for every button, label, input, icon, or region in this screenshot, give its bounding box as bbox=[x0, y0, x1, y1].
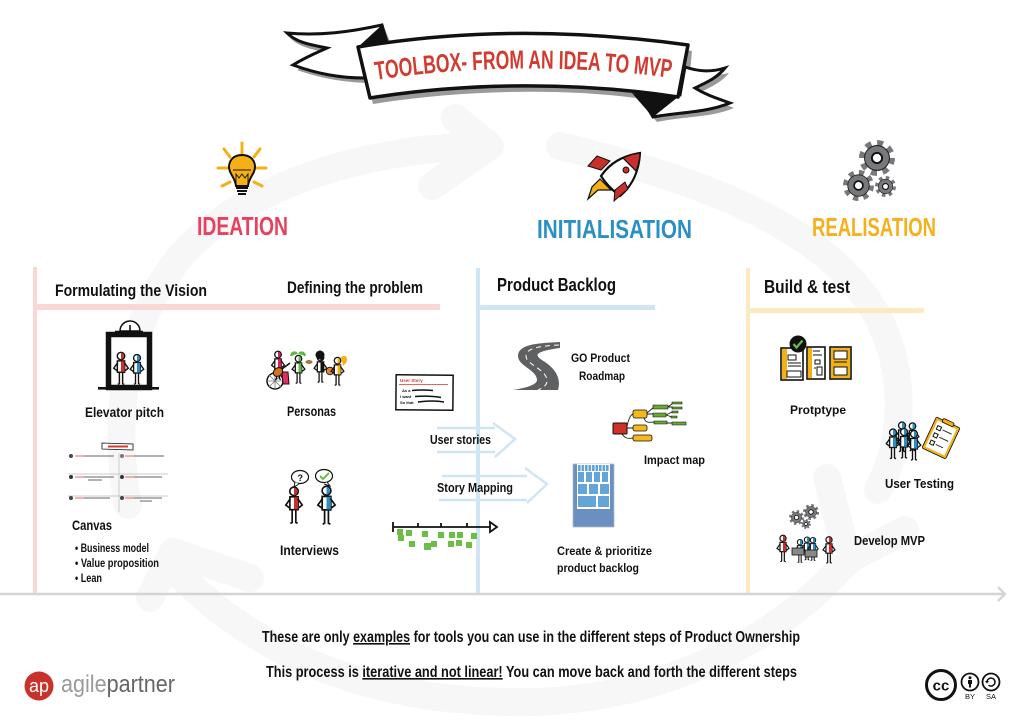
icon: user story card: I want bbox=[400, 394, 412, 399]
label: elevator pitch: Elevator pitch bbox=[85, 404, 164, 420]
banner body bbox=[358, 33, 688, 98]
list: canvas types: • Business model bbox=[75, 541, 149, 555]
footer note: iterative: This process is iterative and not linear! You can move back and forth the different steps bbox=[266, 664, 797, 681]
icon: user story card: So that bbox=[400, 400, 414, 405]
label: create and prioritize product backlog: Create & prioritize bbox=[557, 544, 652, 558]
label: interviews: Interviews bbox=[280, 542, 339, 558]
creative commons badges: BY bbox=[965, 692, 975, 701]
label: user stories: User stories bbox=[430, 432, 491, 447]
icon: rocket bbox=[588, 153, 640, 201]
creative commons badges bbox=[926, 670, 1000, 701]
icon: prototype wireframes bbox=[781, 336, 851, 380]
story map timeline bbox=[393, 522, 497, 550]
label: create and prioritize product backlog: product backlog bbox=[557, 561, 639, 575]
icon: develop team bbox=[777, 505, 835, 563]
folds bbox=[358, 25, 388, 47]
label: develop mvp: Develop MVP bbox=[854, 533, 925, 548]
icon: interview figures: ? bbox=[298, 473, 303, 483]
logo: agile partner bbox=[24, 671, 175, 700]
icon: product backlog bbox=[573, 464, 614, 527]
title text: TOOLBOX- FROM AN IDEA TO MVP bbox=[374, 50, 672, 80]
creative commons badges: cc bbox=[933, 678, 949, 694]
list: canvas types: • Value proposition bbox=[75, 556, 159, 570]
icon: road bbox=[513, 342, 560, 390]
list: canvas types bbox=[75, 541, 159, 585]
label: story mapping: Story Mapping bbox=[437, 480, 513, 495]
icon: impact map bbox=[613, 402, 686, 441]
label: canvas: Canvas bbox=[72, 517, 112, 533]
label: go product roadmap bbox=[571, 351, 630, 383]
icon: user story card: User Story bbox=[400, 378, 423, 383]
footer note: examples: These are only examples for tools you can use in the different steps of Product Ownership bbox=[262, 629, 800, 646]
label: user testing: User Testing bbox=[885, 476, 954, 491]
icon: user story card: As a bbox=[402, 388, 411, 393]
title banner bbox=[283, 23, 734, 122]
background cycle arrows bbox=[121, 118, 905, 702]
label: impact map: Impact map bbox=[644, 453, 705, 467]
creative commons badges: SA bbox=[986, 692, 996, 701]
icon: user story card bbox=[396, 375, 453, 410]
logo: agile partner: agilepartner bbox=[61, 671, 175, 698]
icon: interview figures bbox=[286, 470, 335, 524]
icon: elevator bbox=[98, 321, 159, 390]
heading: initialisation: INITIALISATION bbox=[537, 214, 692, 244]
label: prototype: Protptype bbox=[790, 403, 846, 417]
left tail bbox=[287, 25, 387, 78]
heading: ideation: IDEATION bbox=[197, 211, 288, 241]
list: canvas types: • Lean bbox=[75, 571, 102, 585]
panel heading: formulating the vision: Formulating the Vision bbox=[55, 281, 207, 300]
icon: user testing group bbox=[886, 422, 921, 460]
banner shadow bbox=[290, 30, 734, 122]
icon: clipboard bbox=[922, 415, 961, 459]
heading: realisation: REALISATION bbox=[812, 212, 936, 242]
arrow: user stories bbox=[437, 423, 515, 457]
label: create and prioritize product backlog bbox=[557, 544, 652, 575]
logo: agile partner: ap bbox=[29, 676, 49, 696]
icon: gears bbox=[846, 143, 894, 198]
label: go product roadmap: GO Product bbox=[571, 351, 630, 365]
icon: personas bbox=[267, 350, 346, 389]
label: personas: Personas bbox=[287, 403, 336, 419]
arrow: story mapping bbox=[439, 468, 547, 503]
panel heading: defining the problem: Defining the problem bbox=[287, 278, 423, 297]
icon: light bulb bbox=[218, 143, 266, 194]
panel heading: product backlog: Product Backlog bbox=[497, 275, 616, 295]
section dividers bbox=[33, 267, 924, 594]
timeline baseline arrow bbox=[0, 587, 1005, 601]
canvas thumbnail bbox=[68, 443, 168, 512]
panel heading: build and test: Build & test bbox=[764, 277, 850, 297]
right tail bbox=[640, 67, 730, 117]
label: go product roadmap: Roadmap bbox=[579, 369, 625, 383]
